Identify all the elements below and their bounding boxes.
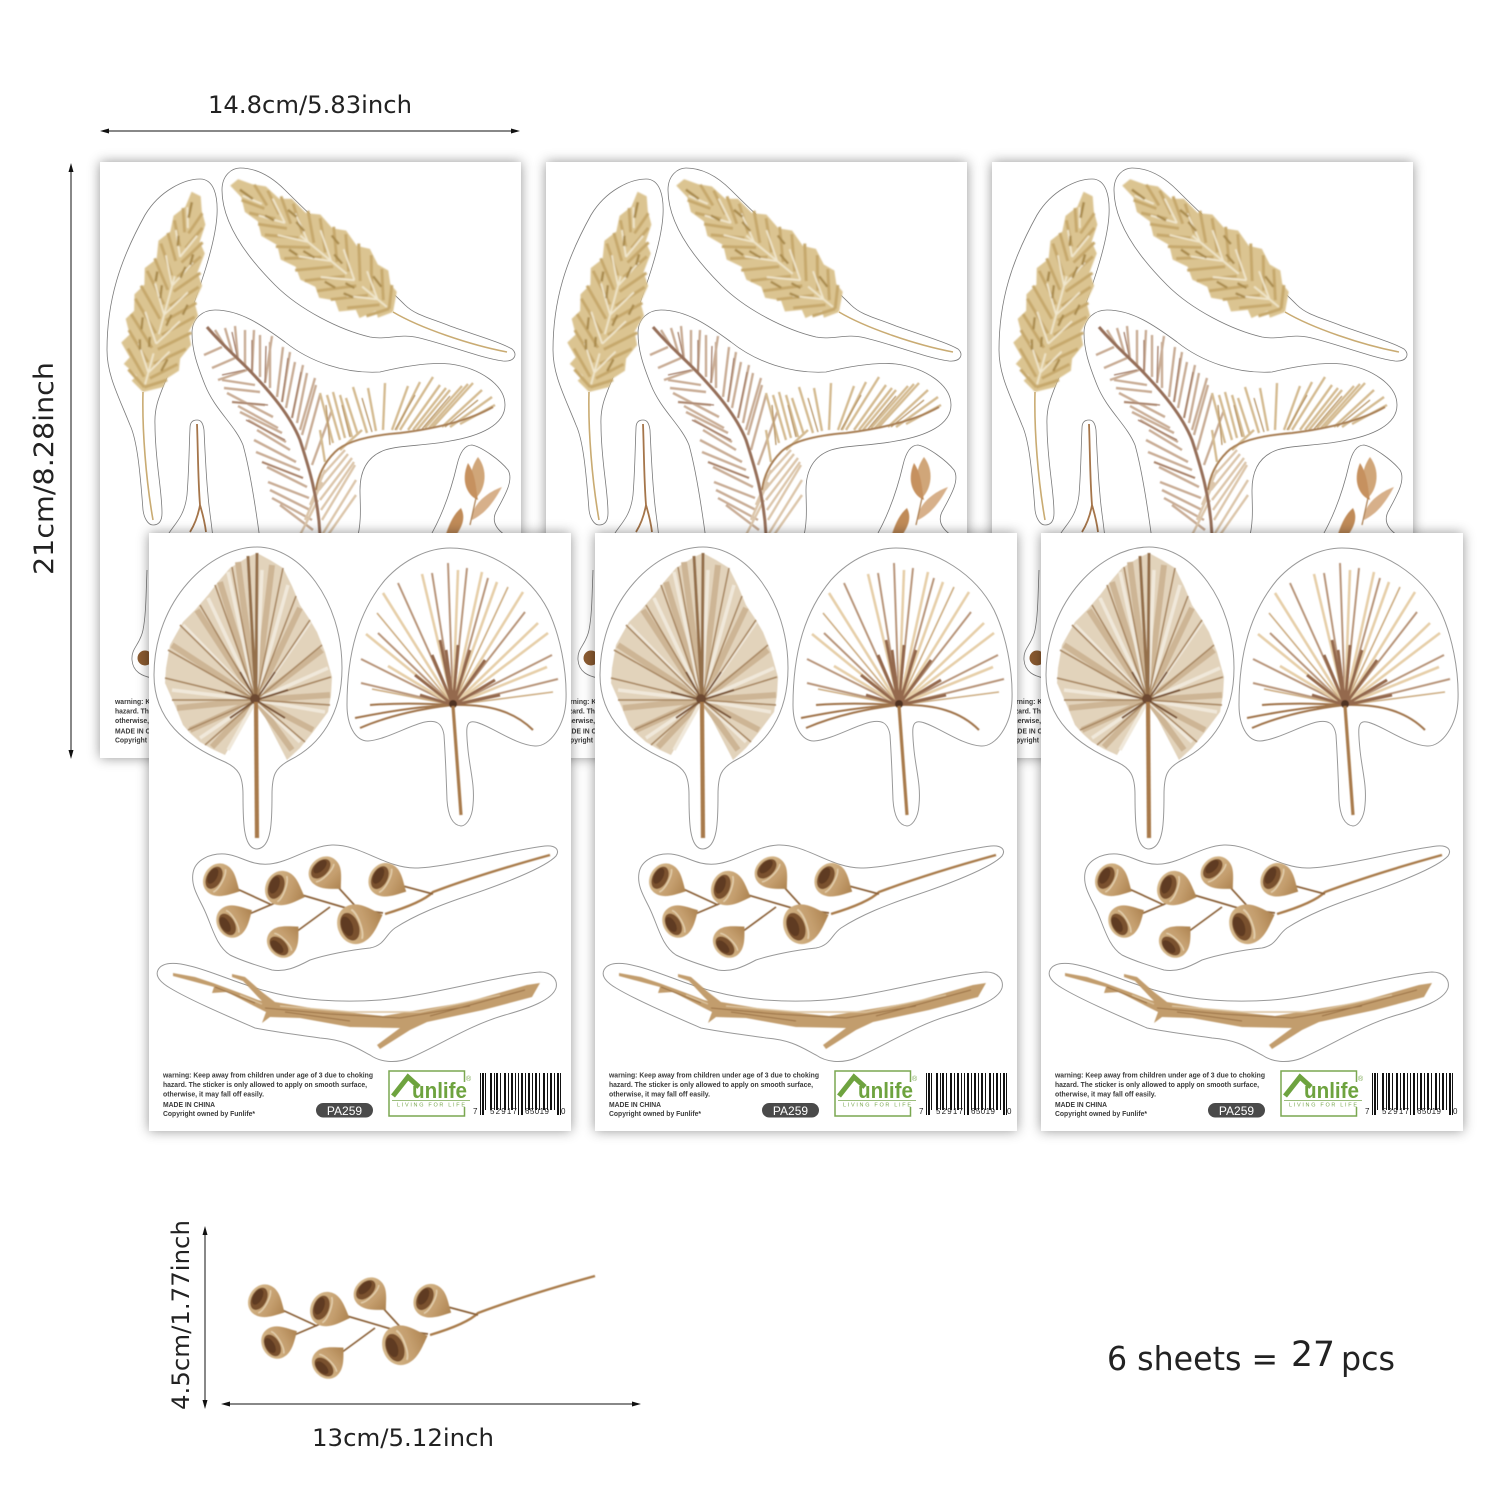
warning text: MADE IN CHINA bbox=[561, 728, 613, 736]
plant: small leaves bbox=[446, 457, 502, 534]
arrow: sheet height bbox=[68, 163, 74, 759]
barcode: 65019 bbox=[1417, 1107, 1442, 1116]
plant: feather frond bbox=[204, 326, 495, 535]
arrow: sheet width bbox=[100, 128, 520, 134]
pod width label: 13cm/5.12inch bbox=[312, 1424, 494, 1452]
warning text: otherwise, it may fall off easily. bbox=[1055, 1092, 1156, 1098]
warning text: Copyright owned by Funlife* bbox=[163, 1111, 255, 1118]
plant: spiky palm leaf bbox=[1247, 563, 1450, 815]
warning text: warning: Keep away from children under age of 3 due to choking bbox=[1006, 699, 1217, 706]
logo: Funlife bbox=[1281, 1071, 1364, 1116]
barcode: 65019 bbox=[525, 1107, 550, 1116]
panel: front sheet 1 bbox=[149, 533, 571, 1131]
barcode: 7 bbox=[919, 1107, 924, 1116]
warning text: MADE IN CHINA bbox=[1055, 1102, 1107, 1109]
logo: Funlife bbox=[389, 1071, 472, 1116]
warning text: warning: Keep away from children under age of 3 due to choking bbox=[608, 1072, 819, 1080]
panel: back sheet 3 bbox=[992, 155, 1413, 758]
warning text bbox=[560, 699, 771, 744]
arrow: pod height bbox=[202, 1226, 208, 1409]
logo: Funlife: LIVING FOR LIFE bbox=[397, 1102, 465, 1108]
sheet count summary: 27 bbox=[1291, 1335, 1335, 1375]
plant: spiky palm leaf bbox=[801, 563, 1004, 815]
plant: driftwood branch bbox=[1065, 973, 1432, 1049]
logo: Funlife: LIVING FOR LIFE bbox=[843, 1102, 911, 1108]
warning text: hazard. The sticker is only allowed to apply on smooth surface, bbox=[609, 1082, 813, 1089]
product code pill: PA259 bbox=[1219, 1104, 1254, 1118]
warning text: Copyright owned by Funlife* bbox=[1007, 738, 1099, 744]
barcode bbox=[919, 1073, 1012, 1116]
barcode bbox=[1365, 1073, 1458, 1116]
warning text: otherwise, it may fall off easily. bbox=[609, 1092, 710, 1098]
warning text bbox=[1006, 699, 1217, 744]
warning text: otherwise, it may fall off easily. bbox=[561, 718, 662, 725]
product code pill bbox=[316, 1103, 373, 1118]
warning text bbox=[608, 1072, 819, 1118]
logo: Funlife: ® bbox=[1358, 1075, 1364, 1083]
plant: pampas grass 2 bbox=[211, 155, 507, 352]
warning text: Copyright owned by Funlife* bbox=[561, 738, 653, 744]
warning text: hazard. The sticker is only allowed to apply on smooth surface, bbox=[163, 1082, 367, 1089]
warning text bbox=[114, 699, 325, 744]
product code pill: PA259 bbox=[327, 1104, 362, 1118]
sheet count summary: pcs bbox=[1341, 1339, 1395, 1378]
plant: thin twig bbox=[190, 424, 206, 532]
warning text: Copyright owned by Funlife* bbox=[1055, 1111, 1147, 1118]
plant: feather frond bbox=[1096, 326, 1387, 535]
logo: Funlife: unlife bbox=[858, 1078, 913, 1103]
plant: small leaves bbox=[1338, 457, 1394, 534]
barcode: 7 bbox=[1365, 1107, 1370, 1116]
plant: fan palm leaf bbox=[1057, 553, 1224, 838]
warning text: Copyright owned by Funlife* bbox=[609, 1111, 701, 1118]
plant: pampas grass 2 bbox=[1103, 155, 1399, 352]
product code pill bbox=[1208, 1103, 1265, 1118]
warning text: hazard. The sticker is only allowed to apply on smooth surface, bbox=[1055, 1082, 1259, 1089]
panel: back sheet 1 bbox=[100, 155, 521, 758]
plant: small leaves bbox=[892, 457, 948, 534]
plant: thin twig bbox=[1082, 424, 1098, 532]
warning text: hazard. The sticker is only allowed to apply on smooth surface, bbox=[115, 708, 319, 716]
panel: back sheet 2 bbox=[546, 155, 967, 758]
warning text: hazard. The sticker is only allowed to apply on smooth surface, bbox=[561, 708, 765, 716]
product code pill: PA259 bbox=[773, 1104, 808, 1118]
warning text: otherwise, it may fall off easily. bbox=[115, 718, 216, 725]
warning text bbox=[162, 1072, 373, 1118]
barcode: 65019 bbox=[971, 1107, 996, 1116]
warning text: hazard. The sticker is only allowed to apply on smooth surface, bbox=[1007, 708, 1211, 716]
height dimension label: 21cm/8.28inch bbox=[29, 362, 60, 575]
plant: fan palm leaf bbox=[165, 553, 332, 838]
seed pod fragment bbox=[138, 650, 152, 666]
plant: pampas grass 1 bbox=[554, 184, 676, 520]
sticker outlines bbox=[553, 168, 961, 678]
warning text: otherwise, it may fall off easily. bbox=[1007, 718, 1108, 725]
sticker outlines bbox=[154, 547, 566, 1062]
pod height label: 4.5cm/1.77inch bbox=[167, 1220, 195, 1410]
warning text bbox=[1054, 1072, 1265, 1118]
barcode: 0 bbox=[561, 1107, 566, 1116]
warning text: warning: Keep away from children under age of 3 due to choking bbox=[114, 699, 325, 706]
warning text: warning: Keep away from children under age of 3 due to choking bbox=[560, 699, 771, 706]
logo: Funlife: ® bbox=[466, 1075, 472, 1083]
warning text: Copyright owned by Funlife* bbox=[115, 738, 207, 744]
warning text: otherwise, it may fall off easily. bbox=[163, 1092, 264, 1098]
plant: pampas grass 1 bbox=[108, 184, 230, 520]
warning text: MADE IN CHINA bbox=[115, 728, 167, 736]
plant: fan palm leaf bbox=[611, 553, 778, 838]
plant: pampas grass 1 bbox=[1000, 184, 1122, 520]
warning text: warning: Keep away from children under age of 3 due to choking bbox=[1054, 1072, 1265, 1080]
barcode bbox=[473, 1073, 566, 1116]
sticker outlines bbox=[600, 547, 1012, 1062]
barcode: 0 bbox=[1007, 1107, 1012, 1116]
logo: Funlife bbox=[835, 1071, 918, 1116]
plant: seed pod branch sample bbox=[243, 1271, 595, 1385]
warning text: MADE IN CHINA bbox=[609, 1102, 661, 1109]
panel: front sheet 2 bbox=[595, 533, 1017, 1131]
plant: seed pod branch bbox=[644, 850, 996, 964]
plant: spiky palm leaf bbox=[355, 563, 558, 815]
logo: Funlife: ® bbox=[912, 1075, 918, 1083]
plant: pampas grass 2 bbox=[657, 155, 953, 352]
plant: thin twig bbox=[636, 424, 652, 532]
sheet count summary bbox=[1107, 1335, 1395, 1378]
panel: front sheet 3 bbox=[1041, 533, 1463, 1131]
width dimension label: 14.8cm/5.83inch bbox=[208, 91, 412, 119]
warning text: warning: Keep away from children under age of 3 due to choking bbox=[162, 1072, 373, 1080]
arrow: pod width bbox=[221, 1402, 641, 1406]
barcode: 52917 bbox=[936, 1107, 964, 1116]
seed pod fragment bbox=[584, 650, 598, 666]
barcode: 52917 bbox=[490, 1107, 518, 1116]
plant: driftwood branch bbox=[173, 973, 540, 1049]
warning text: MADE IN CHINA bbox=[1007, 728, 1059, 736]
logo: Funlife: LIVING FOR LIFE bbox=[1289, 1102, 1357, 1108]
seed pod fragment bbox=[1030, 650, 1044, 666]
barcode: 7 bbox=[473, 1107, 478, 1116]
plant: seed pod branch bbox=[198, 850, 550, 964]
sticker outlines bbox=[1046, 547, 1458, 1062]
plant: driftwood branch bbox=[619, 973, 986, 1049]
warning text: MADE IN CHINA bbox=[163, 1102, 215, 1109]
plant: feather frond bbox=[650, 326, 941, 535]
barcode: 0 bbox=[1453, 1107, 1458, 1116]
barcode: 52917 bbox=[1382, 1107, 1410, 1116]
logo: Funlife: unlife bbox=[412, 1078, 467, 1103]
plant: seed pod branch bbox=[1090, 850, 1442, 964]
product code pill bbox=[762, 1103, 819, 1118]
logo: Funlife: unlife bbox=[1304, 1078, 1359, 1103]
sheet count summary: 6 sheets = bbox=[1107, 1339, 1278, 1378]
sticker outlines bbox=[999, 168, 1407, 678]
sticker outlines bbox=[107, 168, 515, 678]
